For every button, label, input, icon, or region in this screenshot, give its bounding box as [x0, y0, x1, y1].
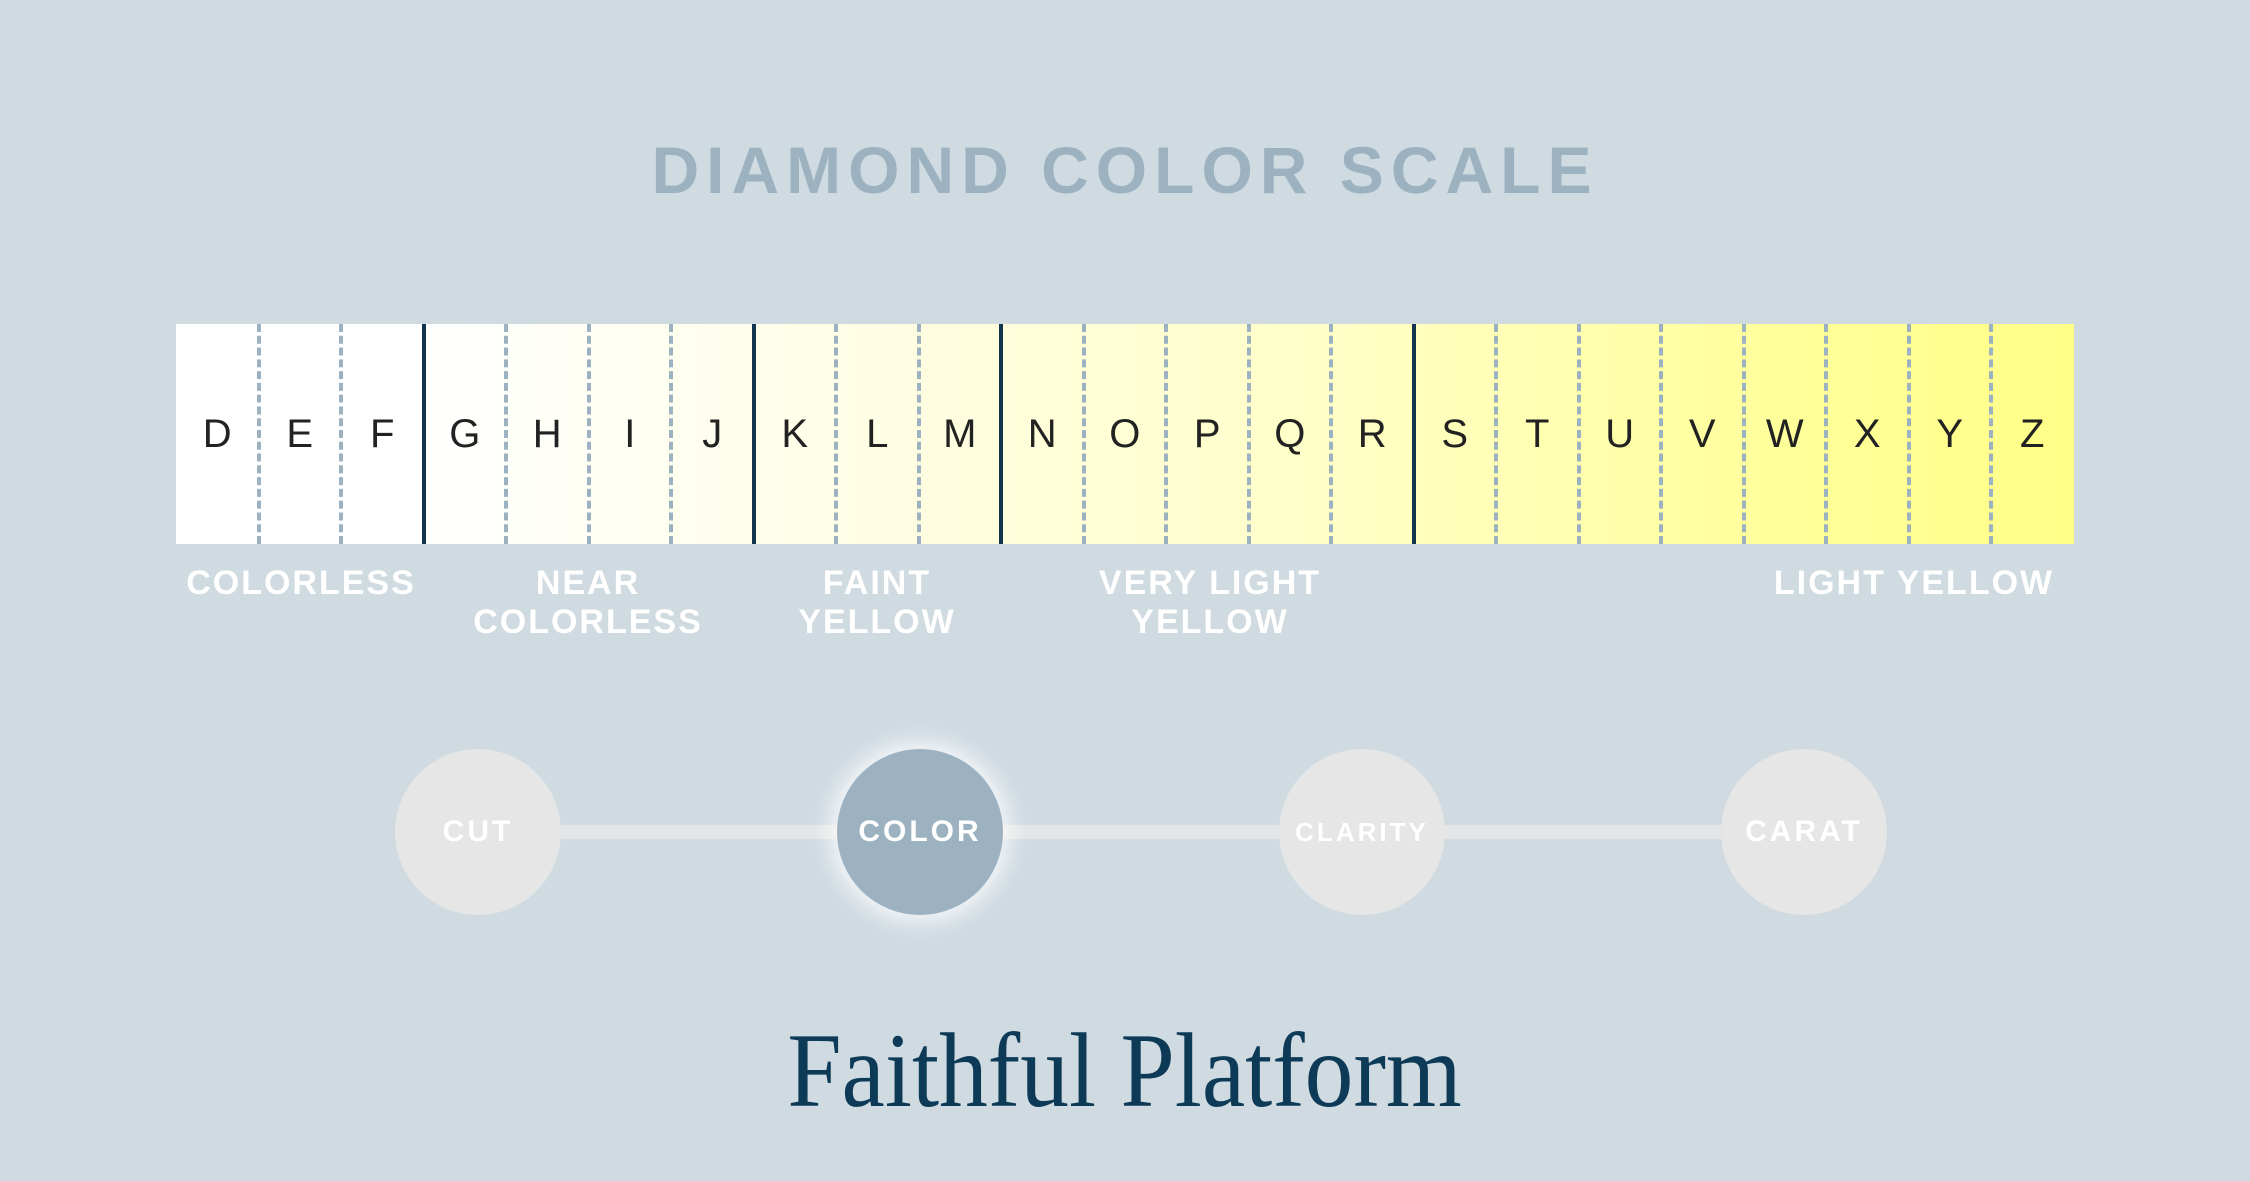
- color scale bar: W: [1766, 412, 1804, 456]
- color scale bar: R: [1358, 412, 1387, 456]
- label: near colorless: COLORLESS: [473, 603, 703, 641]
- color scale bar: V: [1689, 412, 1716, 456]
- label: very light yellow: YELLOW: [1131, 603, 1289, 641]
- color scale bar: X: [1854, 412, 1881, 456]
- color scale bar: U: [1605, 412, 1634, 456]
- color scale bar: F: [370, 412, 394, 456]
- color scale bar: S: [1441, 412, 1468, 456]
- label: colorless: COLORLESS: [186, 564, 416, 602]
- color scale bar: Q: [1274, 412, 1305, 456]
- color scale bar: H: [533, 412, 562, 456]
- color scale bar: Y: [1936, 412, 1963, 456]
- step: color (active): COLOR: [858, 815, 982, 848]
- label: light yellow: LIGHT YELLOW: [1774, 564, 2054, 602]
- color scale bar: Z: [2020, 412, 2044, 456]
- connector line: [478, 825, 1804, 839]
- step: carat: [1721, 749, 1887, 915]
- color scale bar: E: [286, 412, 313, 456]
- label: near colorless: [473, 564, 703, 641]
- color scale bar: L: [866, 412, 888, 456]
- color scale bar: O: [1109, 412, 1140, 456]
- label: faint yellow: [798, 564, 956, 641]
- step: cut: CUT: [443, 815, 513, 848]
- color scale bar: P: [1194, 412, 1221, 456]
- step: color (active): [837, 749, 1003, 915]
- step: clarity: CLARITY: [1295, 817, 1429, 847]
- logo: Faithful Platform: [788, 1012, 1462, 1129]
- color scale bar: G: [449, 412, 480, 456]
- color scale bar: I: [624, 412, 635, 456]
- color scale bar: J: [702, 412, 722, 456]
- step: cut: [395, 749, 561, 915]
- color scale bar: D: [203, 412, 232, 456]
- step: carat: CARAT: [1745, 815, 1863, 848]
- color scale bar: [176, 324, 2074, 544]
- label: very light yellow: [1099, 564, 1321, 641]
- label: faint yellow: FAINT: [823, 564, 931, 602]
- color scale bar: N: [1028, 412, 1057, 456]
- color scale bar: K: [781, 412, 808, 456]
- label: faint yellow: YELLOW: [798, 603, 956, 641]
- label: near colorless: NEAR: [536, 564, 640, 602]
- step: clarity: [1279, 749, 1445, 915]
- label: very light yellow: VERY LIGHT: [1099, 564, 1321, 602]
- title: DIAMOND COLOR SCALE: [652, 133, 1598, 207]
- color scale bar: M: [943, 412, 976, 456]
- color scale bar: T: [1525, 412, 1549, 456]
